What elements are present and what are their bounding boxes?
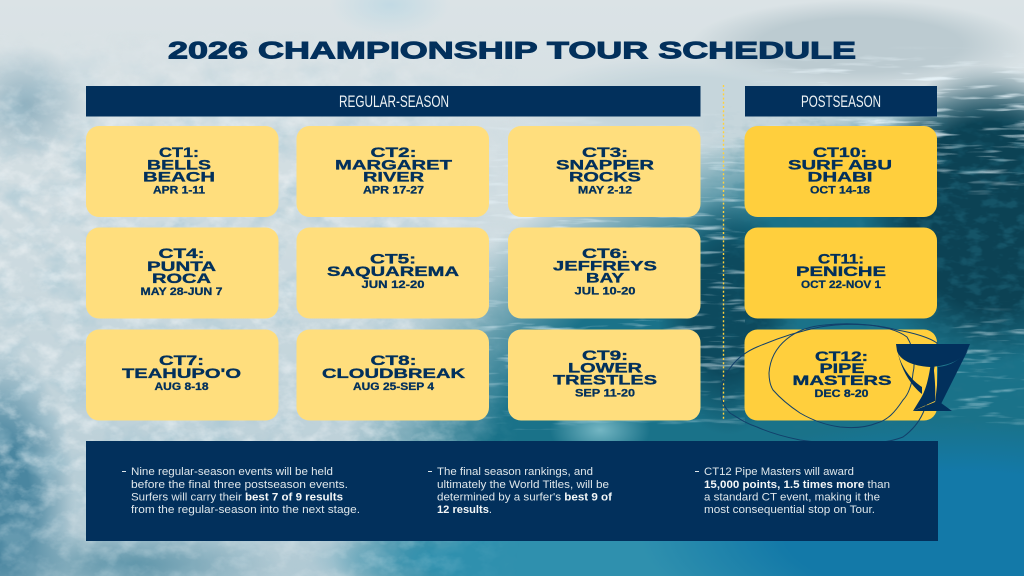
card: CT12 Pipe Masters: DEC 8-20: [814, 388, 868, 400]
note 1: regular season: [122, 466, 360, 516]
divider: [722, 85, 724, 421]
card: CT9 Lower Trestles: SEP 11-20: [575, 388, 635, 400]
note 3: Pipe Masters points: most consequential stop on Tour.: [704, 504, 875, 516]
card: CT1 Bells Beach: BEACH: [143, 170, 215, 184]
note 2: final rankings: 12 results.: [437, 504, 492, 516]
card: CT11 Peniche: CT11:: [818, 252, 864, 266]
card: CT6 Jeffreys Bay: CT6:: [582, 246, 628, 261]
note 3: Pipe Masters points: a standard CT event, making it the: [704, 492, 880, 504]
note 2: final rankings: determined by a surfer's best 9 of: [437, 492, 612, 504]
postseason header: [745, 86, 937, 116]
card: CT10 Surf Abu Dhabi: OCT 14-18: [810, 184, 870, 196]
card: CT7 Teahupo'o: AUG 8-18: [154, 381, 208, 393]
card: CT4 Punta Roca: PUNTA: [147, 259, 216, 274]
note 1: regular season: from the regular-season into the next stage.: [131, 504, 360, 516]
card: CT12 Pipe Masters: CT12:: [815, 349, 868, 364]
card: CT6 Jeffreys Bay: JUL 10-20: [574, 286, 636, 298]
note 2: final rankings: ultimately the World Titles, will be: [437, 479, 609, 491]
note 2: final rankings: [428, 466, 612, 516]
card: CT3 Snapper Rocks: SNAPPER: [556, 158, 654, 172]
note 1: regular season: before the final three postseason events.: [131, 479, 348, 491]
note 3: Pipe Masters points: 15,000 points, 1.5 times more than: [704, 479, 890, 491]
card: CT9 Lower Trestles: TRESTLES: [553, 372, 657, 388]
card: CT3 Snapper Rocks: CT3:: [582, 145, 628, 160]
note 1: regular season: Surfers will carry their best 7 of 9 results: [131, 492, 343, 504]
card: CT11 Peniche: [744, 228, 937, 318]
card: CT6 Jeffreys Bay: [508, 228, 700, 318]
card: CT2 Margaret River: [296, 126, 489, 217]
card: CT8 Cloudbreak: CLOUDBREAK: [322, 366, 465, 381]
card: CT2 Margaret River: APR 17-27: [363, 184, 424, 196]
panel: notes: [86, 441, 938, 541]
card: CT10 Surf Abu Dhabi: DHABI: [808, 170, 872, 184]
card: CT4 Punta Roca: CT4:: [158, 246, 204, 261]
card: CT9 Lower Trestles: [508, 330, 700, 420]
card: CT2 Margaret River: CT2:: [370, 145, 416, 160]
note 2: final rankings: The final season rankings, and: [437, 466, 593, 478]
card: CT7 Teahupo'o: [86, 330, 278, 420]
card: CT7 Teahupo'o: TEAHUPO'O: [122, 366, 241, 381]
card: CT4 Punta Roca: ROCA: [152, 271, 211, 286]
icon: trophy logo: [896, 344, 970, 411]
card: CT3 Snapper Rocks: MAY 2-12: [578, 184, 632, 196]
card: CT1 Bells Beach: [86, 126, 278, 217]
card: CT2 Margaret River: RIVER: [363, 170, 424, 184]
card: CT10 Surf Abu Dhabi: SURF ABU: [788, 158, 892, 172]
card: CT12 Pipe Masters: PIPE: [820, 361, 864, 376]
card: CT6 Jeffreys Bay: BAY: [586, 270, 624, 286]
card: CT10 Surf Abu Dhabi: CT10:: [813, 145, 867, 160]
card: CT1 Bells Beach: APR 1-11: [153, 184, 205, 196]
card: CT2 Margaret River: MARGARET: [335, 158, 453, 172]
card: CT9 Lower Trestles: CT9:: [582, 348, 628, 363]
card: CT9 Lower Trestles: LOWER: [568, 360, 642, 376]
card: CT4 Punta Roca: MAY 28-JUN 7: [140, 286, 222, 298]
postseason header: POSTSEASON: [801, 93, 881, 111]
regular-season header: [86, 86, 700, 116]
icon: hand-drawn rings around CT12: [721, 324, 937, 444]
title: 2026 CHAMPIONSHIP TOUR SCHEDULE: [168, 38, 856, 65]
card: CT5 Saquarema: CT5:: [370, 252, 416, 266]
card: CT5 Saquarema: JUN 12-20: [362, 279, 424, 291]
note 1: regular season: Nine regular-season events will be held: [131, 466, 333, 478]
card: CT8 Cloudbreak: [296, 330, 489, 420]
card: CT1 Bells Beach: CT1:: [159, 145, 199, 160]
card: CT11 Peniche: PENICHE: [796, 264, 886, 279]
regular-season header: REGULAR-SEASON: [339, 93, 449, 111]
note 3: Pipe Masters points: [695, 466, 890, 516]
card: CT6 Jeffreys Bay: JEFFREYS: [553, 258, 657, 274]
card: CT8 Cloudbreak: CT8:: [370, 353, 416, 368]
card: CT5 Saquarema: [296, 228, 489, 318]
card: CT3 Snapper Rocks: [508, 126, 700, 217]
card: CT7 Teahupo'o: CT7:: [159, 353, 204, 368]
card: CT3 Snapper Rocks: ROCKS: [569, 170, 641, 184]
card: CT12 Pipe Masters: [744, 330, 937, 420]
card: CT1 Bells Beach: BELLS: [147, 158, 211, 172]
card: CT10 Surf Abu Dhabi: [744, 126, 937, 217]
card: CT12 Pipe Masters: MASTERS: [792, 373, 892, 388]
card: CT8 Cloudbreak: AUG 25-SEP 4: [353, 381, 435, 393]
note 3: Pipe Masters points: CT12 Pipe Masters will award: [704, 466, 854, 478]
card: CT11 Peniche: OCT 22-NOV 1: [801, 279, 881, 291]
card: CT4 Punta Roca: [86, 228, 278, 318]
card: CT5 Saquarema: SAQUAREMA: [327, 264, 459, 279]
